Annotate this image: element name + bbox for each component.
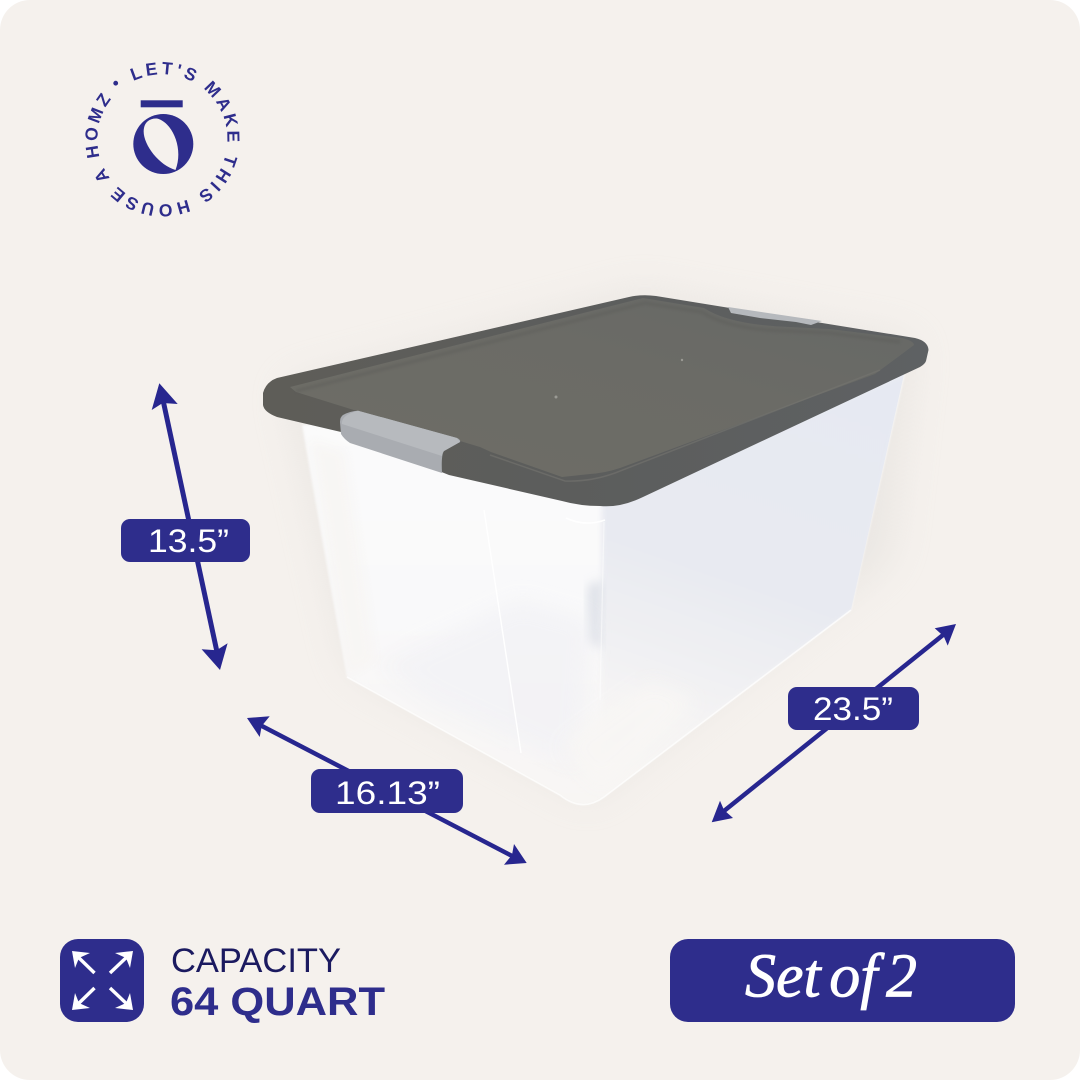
front latch (340, 411, 460, 473)
bin bottom edge highlight (347, 610, 851, 805)
width label (311, 769, 463, 813)
bin body (302, 372, 905, 805)
width dimension arrow (247, 716, 527, 865)
capacity heading: CAPACITY (171, 942, 341, 980)
width label: 16.13” (335, 775, 440, 811)
capacity value: 64 QUART (170, 980, 385, 1024)
interior reflections (588, 580, 602, 650)
lid top surface (290, 298, 914, 477)
soft wall shadow (285, 290, 915, 800)
height label (121, 519, 250, 562)
logo circular tagline: LET'S MAKE THIS HOUSE A HOMZ (85, 62, 240, 216)
length label (788, 687, 919, 730)
capacity text (170, 942, 385, 1024)
front latch highlight (342, 411, 460, 456)
logo letter o (133, 114, 193, 174)
icon: capacity expand arrows (60, 939, 144, 1022)
storage bin product (263, 290, 928, 805)
logo dot (113, 81, 118, 86)
lid specks (554, 359, 683, 398)
set of 2 badge: Set of 2 (745, 942, 917, 1010)
length label: 23.5” (813, 691, 893, 727)
right face tint (602, 374, 904, 685)
lid rim highlight (490, 370, 880, 481)
back latch (728, 307, 822, 325)
height dimension arrow (152, 383, 228, 670)
logo bar (141, 100, 183, 107)
lid outer rim (263, 295, 928, 506)
logo badge (85, 62, 240, 216)
lid groove (296, 303, 900, 391)
bin translucent faces (514, 374, 904, 753)
height label: 13.5” (148, 523, 229, 559)
set of 2 badge (670, 939, 1015, 1022)
length dimension arrow (712, 624, 956, 822)
